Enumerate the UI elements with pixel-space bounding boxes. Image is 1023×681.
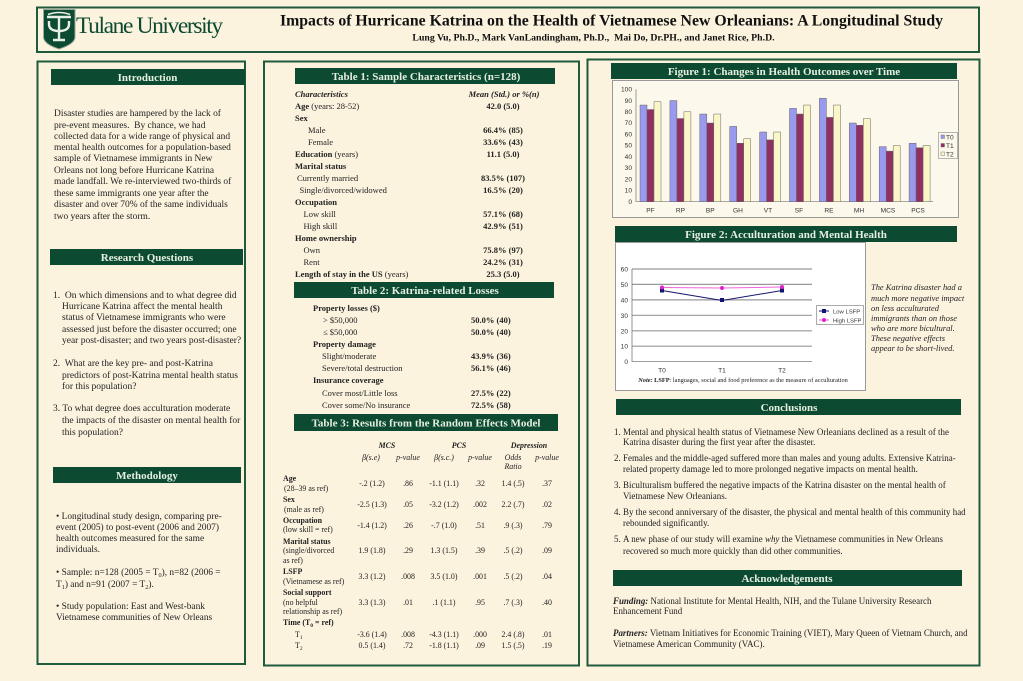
table 2: Katrina-related losses: > $50,000	[323, 315, 358, 325]
heading: Conclusions: Conclusions	[761, 402, 818, 414]
text block: conclusions: Vietnamese New Orleanians.	[623, 491, 727, 501]
table 3: random effects model: .000	[473, 630, 487, 639]
table 3: random effects model: 2	[300, 646, 303, 652]
table 3: random effects model: .002	[473, 500, 487, 509]
icon: Tulane shield logo	[44, 10, 75, 49]
table 3: random effects model: .09	[475, 641, 485, 650]
text block: figure 2 commentary	[871, 282, 965, 353]
heading: Table 2: Table 2: Katrina-related Losses	[351, 285, 500, 297]
title: Impacts of Hurricane Katrina on the Health of Vietnamese New Orleanians: A Longitudinal Study	[280, 12, 943, 30]
table 3: random effects model: .04	[542, 572, 552, 581]
table 3: random effects model: 2.2 (.7)	[501, 500, 525, 509]
heading: Methodology	[53, 467, 241, 483]
text block: acknowledgements: Partners: Vietnam Initiatives for Economic Training (VIET), Mary Queen of Vietnam Church, and	[613, 628, 968, 638]
table 3: random effects model: .01	[403, 598, 413, 607]
table 1: sample characteristics: Marital status	[295, 161, 347, 171]
table 1: sample characteristics: 24.2% (31)	[483, 257, 523, 267]
text block: methodology: • Sample: n=128 (2005 = T	[56, 568, 158, 578]
text block: acknowledgements	[612, 596, 968, 649]
text block: figure 2 commentary: The Katrina disaster had a	[871, 282, 962, 292]
text block: research questions: 2. What are the key pre- and post-Katrina	[53, 359, 214, 369]
line chart: acculturation and mental health: 30	[621, 313, 628, 320]
bar chart: health outcomes over time: PF	[646, 208, 655, 214]
table 3: random effects model: 1	[300, 635, 303, 641]
text block: methodology: ), n=82 (2006 =	[162, 567, 221, 578]
heading: Conclusions	[616, 399, 961, 415]
table 3: random effects model: β(s.c.)	[433, 453, 454, 462]
bar chart: health outcomes over time: 0	[628, 199, 632, 206]
table 2: Katrina-related losses: Insurance coverage	[313, 375, 384, 385]
table 3: random effects model: .26	[403, 521, 413, 530]
text block: conclusions: related property damage led to more prolonged negative impacts on mental health.	[623, 464, 918, 474]
text block: conclusions: Mental and physical health status of Vietnamese New Orleanians declined as a result of the	[623, 427, 949, 437]
table 3: random effects model: .9 (.3)	[503, 521, 523, 530]
text block: conclusions: By the second anniversary of the disaster, the physical and mental health of this community had	[623, 507, 966, 517]
table 3: random effects model: .7 (.3)	[503, 598, 523, 607]
text block: conclusions: recovered so much more quickly than did other communities.	[623, 546, 843, 556]
text block: introduction: pre-event measures. By chance, we had	[54, 121, 206, 131]
table 3: random effects model: .008	[401, 572, 415, 581]
text block: conclusions: 3.	[614, 480, 621, 490]
table 3: random effects model: β(s.e)	[361, 453, 380, 462]
table 3: random effects model: 0.5 (1.4)	[359, 641, 386, 650]
text block: conclusions: A new phase of our study will examine why the Vietnamese communities in New Orleans	[623, 534, 944, 544]
heading: Table 2	[294, 282, 554, 298]
text block: methodology: Vietnamese communities of New Orleans	[56, 612, 213, 623]
table 3: random effects model: Marital status	[283, 537, 331, 546]
table 3: random effects model: -.7 (1.0)	[431, 521, 457, 530]
text block: conclusions: 2.	[614, 453, 621, 463]
table 2: Katrina-related losses: Property damage	[313, 339, 376, 349]
panel: tables	[264, 62, 579, 666]
table 1: sample characteristics: Home ownership	[295, 233, 357, 243]
line chart: acculturation and mental health: T1	[718, 368, 726, 374]
legend: figure 2: Low LSFP	[833, 310, 860, 316]
table 2: Katrina-related losses: 50.0% (40)	[471, 315, 511, 325]
table 3: random effects model: .19	[542, 641, 552, 650]
table 3: random effects model: .001	[473, 572, 487, 581]
table 3: random effects model: p-value	[395, 453, 420, 462]
table 2: Katrina-related losses: 72.5% (58)	[471, 400, 511, 410]
table 3: random effects model: LSFP	[283, 567, 302, 576]
legend: figure 2: High LSFP	[833, 318, 862, 324]
table 3: random effects model: .37	[542, 479, 552, 488]
bar chart: health outcomes over time: MCS	[881, 208, 896, 214]
text block: figure 2 commentary: who are more bicultural.	[871, 323, 955, 333]
text block: methodology: ).	[148, 579, 154, 590]
heading: Table 3	[294, 414, 558, 431]
table 3: random effects model: 3.3 (1.3)	[359, 598, 386, 607]
table 3: random effects model: p-value	[534, 453, 559, 462]
table 3: random effects model: .79	[542, 521, 552, 530]
table 1: sample characteristics: 33.6% (43)	[483, 137, 523, 147]
line chart: acculturation and mental health: T0	[658, 368, 666, 374]
table 3: random effects model: .86	[403, 479, 413, 488]
table 3: random effects model: (Vietnamese as ref)	[283, 577, 345, 586]
table 3: random effects model: -3.2 (1.2)	[429, 500, 459, 509]
table 3: random effects model: .40	[542, 598, 552, 607]
table 3: random effects model	[283, 441, 559, 652]
table 1: sample characteristics: 75.8% (97)	[483, 245, 523, 255]
text block: introduction: these same immigrants one year after the	[54, 188, 209, 199]
table 3: random effects model: -4.3 (1.1)	[429, 630, 459, 639]
chart note: Note: LSFP: languages, social and food preference as the measure of acculturation	[637, 377, 849, 384]
text block: introduction: collected data for a wide range of physical and	[54, 131, 230, 142]
table 1: sample characteristics: Currently married	[297, 173, 359, 183]
heading: Figure 2	[615, 226, 957, 242]
text block: research questions: status of Vietnamese immigrants who were	[62, 312, 226, 323]
table 3: random effects model: -1.4 (1.2)	[357, 521, 387, 530]
table 1: sample characteristics: 16.5% (20)	[483, 185, 523, 195]
line chart: acculturation and mental health: 60	[621, 266, 628, 274]
table 3: random effects model: 1.5 (.5)	[501, 641, 525, 650]
table 3: random effects model: Odds	[505, 453, 521, 462]
text block: introduction: disaster and over 70% of the same individuals	[54, 199, 228, 210]
legend: figure 1: T1	[946, 143, 954, 150]
text block: methodology: ) and n=91 (2007 = T	[65, 579, 146, 590]
table 3: random effects model: (low skill = ref)	[283, 525, 333, 534]
table 1: sample characteristics: 66.4% (85)	[483, 125, 523, 135]
heading: Research Questions	[50, 249, 243, 265]
heading: Research Questions: Research Questions	[101, 252, 194, 264]
text block: acknowledgements: Funding: National Institute for Mental Health, NIH, and the Tulane University Research	[612, 596, 932, 606]
text block: research questions: this population?	[62, 428, 123, 438]
bar chart: health outcomes over time: 10	[625, 188, 632, 195]
table 2: Katrina-related losses: 56.1% (46)	[471, 363, 511, 373]
table 3: random effects model: .29	[403, 546, 413, 555]
table 3: random effects model: -3.6 (1.4)	[357, 630, 387, 639]
bar chart: health outcomes over time: GH	[733, 208, 743, 214]
text block: figure 2 commentary: much more negative impact	[871, 293, 965, 303]
table 3: random effects model: = ref)	[313, 618, 334, 627]
text block: acknowledgements: Enhancement Fund	[613, 606, 683, 616]
table 3: random effects model: T	[295, 630, 300, 639]
table 1: sample characteristics: Education (years)	[295, 149, 358, 159]
table 3: random effects model: Occupation	[283, 516, 323, 525]
bar chart: health outcomes over time: PCS	[911, 208, 925, 214]
table 1: sample characteristics: Mean (Std.) or %(n)	[468, 89, 540, 99]
legend: figure 1: T0	[946, 134, 954, 142]
text block: conclusions: 5.	[614, 534, 621, 544]
bar chart: health outcomes over time: 70	[625, 120, 632, 127]
text block: figure 2 commentary: on less acculturated	[871, 303, 940, 313]
header banner	[37, 8, 979, 52]
text block: conclusions: rebounded significantly.	[623, 518, 709, 528]
table 2: Katrina-related losses: Slight/moderate	[322, 351, 377, 361]
bar chart: health outcomes over time: 100	[621, 86, 632, 94]
heading: Methodology: Methodology	[116, 470, 178, 482]
table 2: Katrina-related losses: 27.5% (22)	[471, 388, 511, 398]
table 3: random effects model: .01	[542, 630, 552, 639]
table 3: random effects model: Time (T	[283, 618, 310, 627]
table 3: random effects model: T	[295, 641, 300, 650]
bar chart: health outcomes over time: 40	[625, 154, 632, 161]
text block: research questions: predictors of post-Katrina mental health status	[62, 370, 238, 381]
bar chart: health outcomes over time: RE	[824, 208, 834, 214]
text block: conclusions: 4.	[614, 507, 621, 517]
table 3: random effects model: relationship as ref)	[283, 607, 343, 616]
table 1: sample characteristics: Female	[308, 137, 333, 147]
line chart: acculturation and mental health: 40	[621, 297, 628, 304]
table 3: random effects model: Ratio	[503, 462, 522, 471]
table 1: sample characteristics: Length of stay in the US (years)	[295, 269, 408, 279]
table 3: random effects model: Age	[283, 474, 297, 483]
text block: acknowledgements: Vietnamese American Community (VAC).	[613, 639, 765, 649]
table 3: random effects model: 2.4 (.8)	[501, 630, 525, 639]
bar chart: health outcomes over time: 20	[625, 176, 632, 183]
table 2: Katrina-related losses: Cover some/No insurance	[322, 400, 411, 410]
text block: methodology: event (2005) to post-event (2006 and 2007)	[56, 522, 219, 533]
text block: research questions: the impacts of the disaster on mental health for	[62, 415, 241, 426]
table 3: random effects model: (male as ref)	[284, 505, 324, 514]
table 2: Katrina-related losses: 50.0% (40)	[471, 327, 511, 337]
table 3: random effects model: .02	[542, 500, 552, 509]
text block: figure 2 commentary: appear to be short-lived.	[871, 343, 954, 353]
table 1: sample characteristics: 83.5% (107)	[481, 173, 525, 183]
table 3: random effects model: Social support	[283, 588, 332, 597]
table 3: random effects model: -.2 (1.2)	[359, 479, 385, 488]
text block: conclusions: Females and the middle-aged suffered more than males and young adults. Extensive Katrina-	[623, 453, 956, 463]
bar chart: health outcomes over time: BP	[706, 208, 715, 214]
legend: figure 1	[938, 132, 958, 158]
text block: introduction: mental health outcomes for a population-based	[54, 142, 231, 153]
table 3: random effects model: 0	[310, 623, 313, 629]
heading: Figure 1	[611, 63, 957, 79]
text block: research questions: Hurricane Katrina affect the mental health	[62, 301, 223, 312]
table 1: sample characteristics: 57.1% (68)	[483, 209, 523, 219]
table 1: sample characteristics: 42.0 (5.0)	[486, 101, 520, 111]
text block: methodology: 0	[158, 572, 162, 579]
text block: conclusions: Katrina disaster during the first year after the disaster.	[623, 437, 815, 447]
text block: figure 2 commentary: These negative effects	[871, 333, 946, 343]
table 3: random effects model: .32	[475, 479, 485, 488]
text block: research questions: 1. On which dimensions and to what degree did	[53, 291, 237, 301]
bar chart: health outcomes over time: MH	[854, 208, 864, 214]
table 1: sample characteristics: Characteristics	[295, 89, 349, 99]
heading: Introduction	[51, 69, 245, 85]
text block: methodology: • Longitudinal study design, comparing pre-	[56, 512, 222, 522]
heading: Figure 1: Figure 1: Changes in Health Outcomes over Time	[668, 66, 900, 78]
table 3: random effects model: .008	[401, 630, 415, 639]
table 3: random effects model: .09	[542, 546, 552, 555]
heading: Acknowledgements: Acknowledgements	[741, 573, 833, 585]
table 2: Katrina-related losses: 43.9% (36)	[471, 351, 511, 361]
text block: figure 2 commentary: immigrants than on those	[871, 313, 957, 323]
table 1: sample characteristics: Sex	[295, 113, 308, 123]
text block: methodology	[56, 512, 222, 623]
text block: research questions: for this population?	[62, 381, 136, 392]
bar chart: health outcomes over time: 60	[625, 132, 632, 138]
table 3: random effects model: 3.5 (1.0)	[431, 572, 458, 581]
table 3: random effects model: p-value	[467, 453, 492, 462]
table 1: sample characteristics: 11.1 (5.0)	[487, 149, 520, 159]
text block: introduction: sample of Vietnamese immigrants in New	[54, 153, 213, 164]
heading: Table 1: Table 1: Sample Characteristics (n=128)	[332, 71, 521, 83]
bar chart: health outcomes over time: RP	[676, 208, 686, 214]
bar chart: health outcomes over time: VT	[764, 208, 772, 214]
table 3: random effects model: .05	[403, 500, 413, 509]
logo wordmark: Tulane University	[76, 13, 223, 39]
table 3: random effects model: -1.1 (1.1)	[429, 479, 459, 488]
table 2: Katrina-related losses	[313, 303, 511, 410]
panel: figures and conclusions	[588, 60, 980, 666]
table 2: Katrina-related losses: Severe/total destruction	[322, 363, 403, 373]
text block: research questions: assessed just before the disaster occurred; one	[62, 324, 237, 335]
table 1: sample characteristics: High skill	[304, 221, 338, 231]
line chart: acculturation and mental health: 20	[621, 328, 628, 335]
table 3: random effects model: (single/divorced	[283, 546, 334, 555]
text block: methodology: • Study population: East and West-bank	[56, 602, 205, 612]
text block: introduction: Orleans not long before Hurricane Katrina	[54, 165, 215, 176]
table 3: random effects model: (no helpful	[283, 598, 319, 607]
text block: introduction: two years after the storm.	[54, 211, 150, 222]
table 3: random effects model: as ref)	[283, 556, 303, 565]
line chart: acculturation and mental health	[616, 242, 866, 390]
table 3: random effects model: .51	[475, 521, 485, 530]
legend: figure 2	[816, 306, 864, 324]
heading: Figure 2: Figure 2: Acculturation and Mental Health	[685, 229, 887, 241]
table 1: sample characteristics: Male	[308, 125, 326, 135]
table 3: random effects model: -1.8 (1.1)	[429, 641, 459, 650]
text block: introduction: made landfall. We re-interviewed two-thirds of	[54, 176, 232, 187]
table 2: Katrina-related losses: ≤ $50,000	[323, 327, 357, 337]
text block: conclusions: 1.	[614, 427, 621, 437]
bar chart: health outcomes over time	[612, 80, 958, 218]
table 2: Katrina-related losses: Cover most/Little loss	[322, 388, 398, 398]
authors: Lung Vu, Ph.D., Mark VanLandingham, Ph.D., Mai Do, Dr.PH., and Janet Rice, Ph.D.	[412, 32, 775, 44]
text block: methodology: 1	[62, 584, 65, 591]
table 3: random effects model: 3.3 (1.2)	[359, 572, 386, 581]
heading: Acknowledgements	[613, 570, 962, 586]
table 1: sample characteristics: Rent	[304, 257, 320, 267]
table 3: random effects model: 1.9 (1.8)	[359, 546, 386, 555]
table 3: random effects model: MCS	[378, 441, 396, 450]
heading: Table 1	[295, 68, 555, 84]
text block: methodology: individuals.	[56, 545, 100, 555]
bar chart: health outcomes over time: 30	[625, 165, 632, 172]
bar chart: health outcomes over time: 90	[625, 98, 632, 105]
table 1: sample characteristics: Single/divorced/widowed	[300, 185, 388, 195]
table 1: sample characteristics: Low skill	[304, 209, 336, 219]
table 3: random effects model: -2.5 (1.3)	[357, 500, 387, 509]
text block: research questions: year post-disaster; and two years post-disaster?	[62, 336, 241, 346]
text block: conclusions	[614, 427, 966, 556]
table 1: sample characteristics: Occupation	[295, 197, 337, 207]
table 3: random effects model: (28–39 as ref)	[284, 484, 329, 493]
table 3: random effects model: 1.4 (.5)	[501, 479, 525, 488]
table 3: random effects model: .95	[475, 598, 485, 607]
table 3: random effects model: .5 (.2)	[503, 546, 523, 555]
table 1: sample characteristics: 42.9% (51)	[483, 221, 523, 231]
text block: introduction	[54, 108, 232, 222]
table 3: random effects model: .39	[475, 546, 485, 555]
line chart: acculturation and mental health: T2	[778, 368, 786, 374]
text block: conclusions: Biculturalism buffered the negative impacts of the Katrina disaster on the mental health of	[623, 480, 946, 490]
table 3: random effects model: Sex	[283, 495, 295, 504]
panel: left column	[38, 62, 245, 664]
table 3: random effects model: Depression	[510, 441, 547, 450]
table 3: random effects model: .1 (1.1)	[432, 598, 456, 607]
table 1: sample characteristics	[295, 89, 540, 279]
bar chart: health outcomes over time: 50	[625, 143, 632, 150]
text block: methodology: health outcomes measured for the same	[56, 533, 204, 544]
table 3: random effects model: .5 (.2)	[503, 572, 523, 581]
table 1: sample characteristics: Age (years: 28-52)	[295, 101, 359, 111]
text block: research questions	[53, 291, 241, 438]
table 3: random effects model: PCS	[452, 441, 467, 450]
table 3: random effects model: 1.3 (1.5)	[431, 546, 458, 555]
line chart: acculturation and mental health: 50	[621, 282, 628, 289]
text block: research questions: 3. To what degree does acculturation moderate	[53, 404, 230, 414]
table 2: Katrina-related losses: Property losses ($)	[313, 303, 380, 313]
legend: figure 1: T2	[946, 152, 954, 158]
table 3: random effects model: .72	[403, 641, 413, 650]
line chart: acculturation and mental health: 0	[624, 359, 628, 366]
text block: introduction: Disaster studies are hampered by the lack of	[54, 108, 222, 119]
line chart: acculturation and mental health: 10	[621, 344, 628, 351]
text block: methodology: T	[56, 580, 62, 590]
heading: Table 3: Table 3: Results from the Random Effects Model	[312, 418, 540, 430]
text block: methodology: 2	[145, 584, 148, 591]
table 1: sample characteristics: 25.3 (5.0)	[486, 269, 520, 279]
bar chart: health outcomes over time: SF	[795, 208, 803, 214]
heading: Introduction: Introduction	[118, 72, 177, 84]
bar chart: health outcomes over time: 80	[625, 109, 632, 116]
table 1: sample characteristics: Own	[304, 245, 321, 255]
